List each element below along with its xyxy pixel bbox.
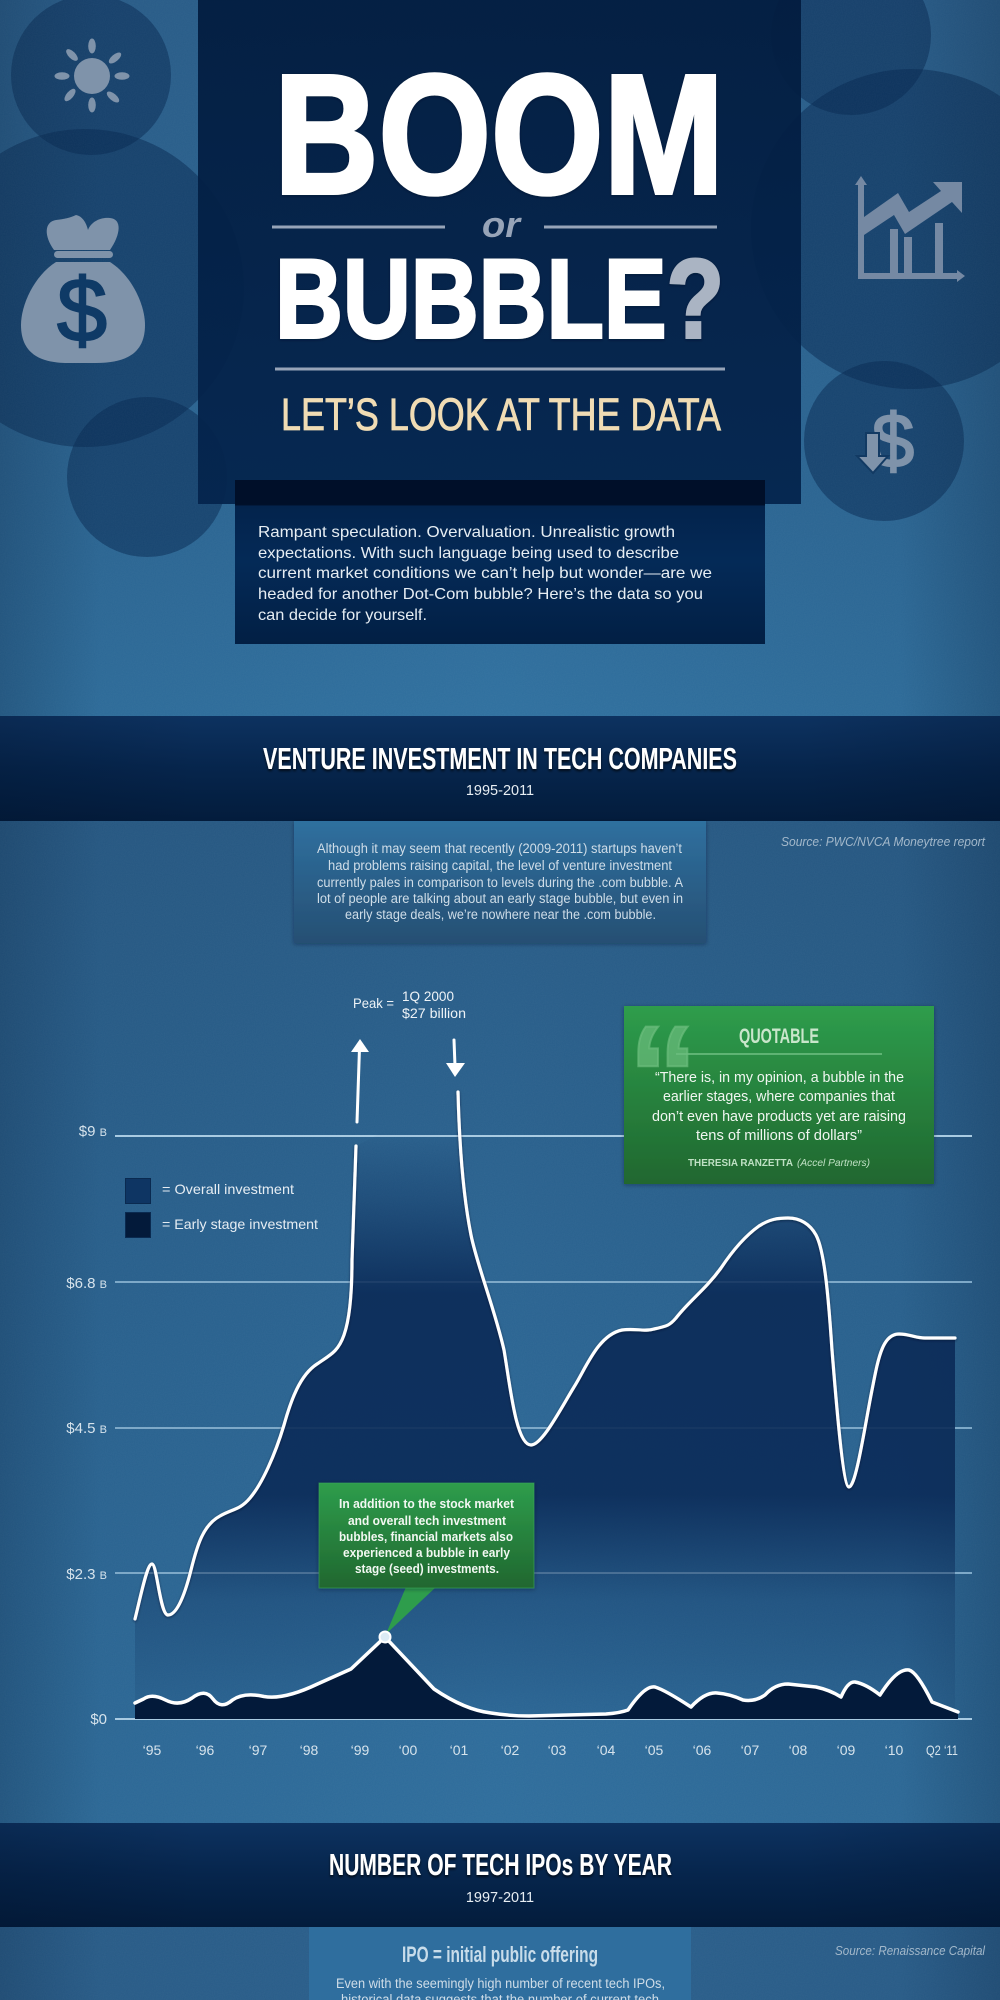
intro text panel: can decide for yourself. <box>258 607 427 624</box>
x axis labels: ‘97 <box>249 1742 268 1758</box>
area: early stage investment <box>135 1637 958 1719</box>
quote text: tens of millions of dollars” <box>696 1127 862 1144</box>
peak marker dot <box>380 1632 390 1642</box>
IPO description box: IPO = initial public offering <box>402 1942 598 1967</box>
intro text panel <box>235 480 765 644</box>
arrow: up to peak <box>351 1039 369 1122</box>
years: 1995-2011 <box>466 783 534 799</box>
x axis labels: ‘05 <box>645 1742 664 1758</box>
peak annotation: $27 billion <box>402 1005 466 1021</box>
title: Bubble?: BUBBLE? <box>275 236 724 362</box>
peak annotation: Peak = <box>353 995 394 1011</box>
x axis labels: ‘09 <box>837 1742 856 1758</box>
area: overall investment <box>135 1092 955 1719</box>
x axis labels: ‘03 <box>548 1742 567 1758</box>
icon: money bag <box>21 215 145 363</box>
title panel <box>198 0 801 504</box>
icon: sun <box>54 38 130 112</box>
title: or <box>272 204 717 245</box>
x axis labels: ‘01 <box>450 1742 469 1758</box>
x axis labels <box>143 1742 958 1758</box>
x axis labels: ‘08 <box>789 1742 808 1758</box>
early stage callout: experienced a bubble in early <box>343 1545 511 1560</box>
early stage callout: stage (seed) investments. <box>355 1561 499 1576</box>
subtitle: LET’S LOOK AT THE DATA <box>281 389 721 440</box>
IPO description box <box>309 1927 691 2000</box>
quote text: don’t even have products yet are raising <box>652 1108 906 1125</box>
heading: NUMBER OF TECH IPOs BY YEAR <box>329 1847 672 1882</box>
y axis labels <box>66 1123 107 1728</box>
x axis labels: ‘02 <box>501 1742 520 1758</box>
intro text panel: headed for another Dot-Com bubble? Here’s the data so you <box>258 586 703 603</box>
x axis labels: ‘04 <box>597 1742 616 1758</box>
section header: IPOs <box>0 1823 1000 1927</box>
chart gridlines <box>115 1136 972 1719</box>
intro text panel: current market conditions we can’t help but wonder—are we <box>258 565 712 582</box>
y axis labels: $4.5 B <box>66 1420 107 1437</box>
early stage callout: In addition to the stock market <box>339 1496 515 1511</box>
legend: = Early stage investment <box>162 1216 318 1232</box>
venture description box: Although it may seem that recently (2009-2011) startups haven’t <box>317 841 682 856</box>
y axis labels: $6.8 B <box>66 1275 107 1292</box>
section header: venture investment <box>0 716 1000 821</box>
quotable heading: QUOTABLE <box>739 1025 819 1048</box>
years: 1997-2011 <box>466 1890 534 1906</box>
intro text panel: expectations. With such language being used to describe <box>258 545 679 562</box>
quote text <box>652 1069 906 1144</box>
source: PWC: Source: PWC/NVCA Moneytree report <box>781 834 986 849</box>
early stage callout <box>319 1483 534 1634</box>
x axis labels: ‘00 <box>399 1742 418 1758</box>
title: Boom: BOOM <box>274 40 724 230</box>
y axis labels: $9 B <box>79 1123 107 1140</box>
icon: falling dollar: $ <box>872 399 914 484</box>
x axis labels: ‘95 <box>143 1742 162 1758</box>
x axis labels: ‘06 <box>693 1742 712 1758</box>
x axis labels: ‘98 <box>300 1742 319 1758</box>
venture description box: had problems raising capital, the level of venture investment <box>328 858 672 873</box>
legend <box>126 1178 318 1238</box>
y axis labels: $0 <box>90 1711 107 1728</box>
attribution: (Accel Partners) <box>797 1157 870 1169</box>
legend: = Overall investment <box>162 1181 294 1197</box>
x axis labels: Q2 ‘11 <box>926 1742 958 1758</box>
x axis labels: ‘99 <box>351 1742 370 1758</box>
title: or: or <box>482 204 522 245</box>
quote text: “There is, in my opinion, a bubble in the <box>655 1069 904 1086</box>
intro text panel: Rampant speculation. Overvaluation. Unrealistic growth <box>258 524 675 541</box>
line: early stage investment <box>135 1637 958 1716</box>
peak annotation: 1Q 2000 <box>402 988 454 1004</box>
heading: VENTURE INVESTMENT IN TECH COMPANIES <box>263 741 737 776</box>
icon: quotation mark: “ <box>628 996 698 1153</box>
icon: rising chart <box>855 176 965 282</box>
early stage callout: bubbles, financial markets also <box>339 1529 513 1544</box>
venture description box: currently pales in comparison to levels during the .com bubble. A <box>317 875 683 890</box>
quote text: earlier stages, where companies that <box>663 1088 896 1105</box>
x axis labels: ‘10 <box>885 1742 904 1758</box>
venture description box <box>294 821 706 943</box>
IPO description box: Even with the seemingly high number of recent tech IPOs, <box>336 1976 665 1991</box>
background bubbles <box>0 0 1000 557</box>
line: overall investment <box>135 1092 955 1619</box>
icon: money bag: $ <box>57 261 107 361</box>
venture description box: lot of people are talking about an early stage bubble, but even in <box>317 891 683 906</box>
arrow: down from peak <box>446 1040 465 1077</box>
early stage callout: and overall tech investment <box>348 1513 507 1528</box>
quotable callout <box>624 996 934 1184</box>
source: Renaissance: Source: Renaissance Capital <box>835 1943 986 1958</box>
y axis labels: $2.3 B <box>66 1566 107 1583</box>
peak annotation <box>353 988 466 1021</box>
attribution: THERESIA RANZETTA <box>688 1157 793 1169</box>
x axis labels: ‘96 <box>196 1742 215 1758</box>
venture description box: early stage deals, we’re nowhere near the .com bubble. <box>345 907 656 922</box>
x axis labels: ‘07 <box>741 1742 760 1758</box>
